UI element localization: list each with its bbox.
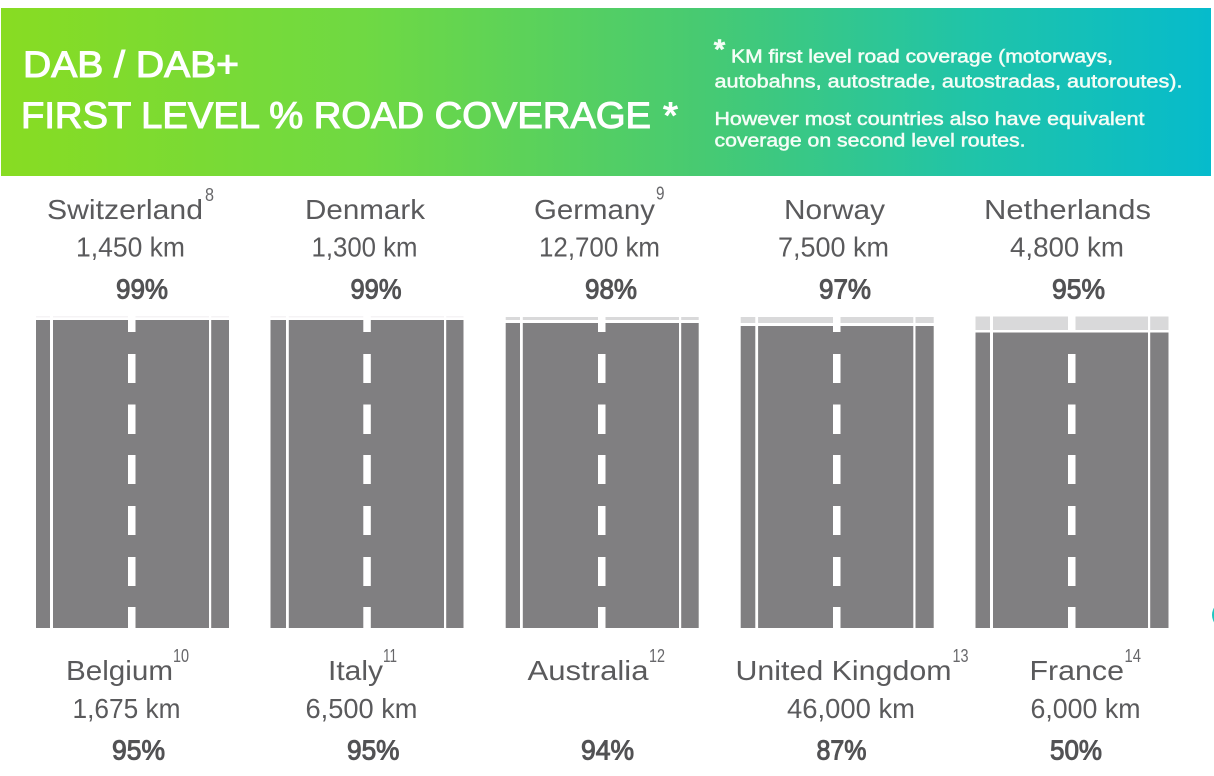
label: Norway: 97%: [819, 274, 871, 304]
label: Italy: Italy: [328, 655, 383, 686]
label: Belgium: [66, 645, 189, 766]
road graphic 2: 99% / 95%: [270, 316, 464, 628]
title: FIRST LEVEL % ROAD COVERAGE: [21, 95, 651, 136]
footnote text: [714, 34, 1182, 150]
footnote text: *: [714, 34, 725, 64]
label: Denmark: 1,300 km: [312, 232, 418, 262]
footnote text: KM first level road coverage (motorways,: [731, 46, 1113, 66]
label: Germany: 98%: [585, 274, 637, 304]
road graphic 4: 97% / 87%: [741, 316, 934, 628]
road graphic 5: 95% / 50%: [976, 316, 1168, 628]
label: France: [1030, 645, 1141, 766]
label: United Kingdom: [736, 645, 968, 766]
label: Netherlands: 95%: [1052, 274, 1105, 304]
label: France: France: [1030, 655, 1124, 686]
footnote text: autobahns, autostrade, autostradas, autoroutes).: [714, 70, 1182, 92]
label: Denmark: 99%: [350, 274, 402, 304]
label: Switzerland: Switzerland: [47, 194, 203, 225]
label: Italy: 11: [383, 645, 397, 666]
label: Australia: 94%: [581, 734, 634, 766]
title: DAB / DAB+: [23, 44, 239, 85]
label: Germany: 12,700 km: [539, 232, 660, 262]
label: Italy: 6,500 km: [306, 693, 418, 724]
label: France: 14: [1124, 645, 1141, 666]
label: Netherlands: Netherlands: [984, 194, 1151, 225]
label: Norway: Norway: [784, 194, 885, 225]
label: Switzerland: 8: [205, 184, 214, 205]
footnote text: coverage on second level routes.: [714, 130, 1026, 150]
label: Netherlands: 4,800 km: [1010, 232, 1124, 262]
teal circle fragment at right edge: [1212, 601, 1214, 629]
label: United Kingdom: United Kingdom: [736, 655, 952, 686]
label: Belgium: 1,675 km: [72, 693, 180, 724]
label: Australia: Australia: [528, 655, 649, 686]
label: Switzerland: [47, 184, 214, 304]
label: Switzerland: 1,450 km: [76, 232, 185, 262]
road graphic 3: 98% / 94%: [506, 316, 699, 628]
label: Norway: 7,500 km: [778, 232, 889, 262]
label: France: 6,000 km: [1030, 693, 1140, 724]
footnote text: However most countries also have equivalent: [714, 108, 1144, 129]
label: United Kingdom: 13: [952, 645, 968, 666]
label: Denmark: Denmark: [305, 194, 425, 225]
label: Germany: Germany: [534, 194, 655, 225]
header banner: [1, 8, 1211, 176]
label: Switzerland: 99%: [116, 274, 168, 304]
label: France: 50%: [1050, 734, 1102, 766]
label: Italy: [306, 645, 418, 766]
label: Australia: [528, 645, 665, 766]
label: Denmark: [305, 194, 425, 304]
label: Italy: 95%: [347, 734, 400, 766]
title: [21, 44, 678, 136]
label: Germany: [534, 182, 664, 304]
title: *: [663, 95, 678, 136]
label: Belgium: Belgium: [66, 655, 173, 686]
label: Germany: 9: [656, 182, 664, 204]
label: United Kingdom: 46,000 km: [787, 693, 915, 724]
label: Norway: [778, 194, 889, 304]
label: Netherlands: [984, 194, 1151, 304]
road graphic 1: 99% / 95%: [36, 316, 229, 628]
label: United Kingdom: 87%: [816, 734, 866, 766]
label: Belgium: 95%: [112, 734, 165, 766]
label: Belgium: 10: [173, 645, 189, 666]
label: Australia: 12: [649, 645, 665, 666]
